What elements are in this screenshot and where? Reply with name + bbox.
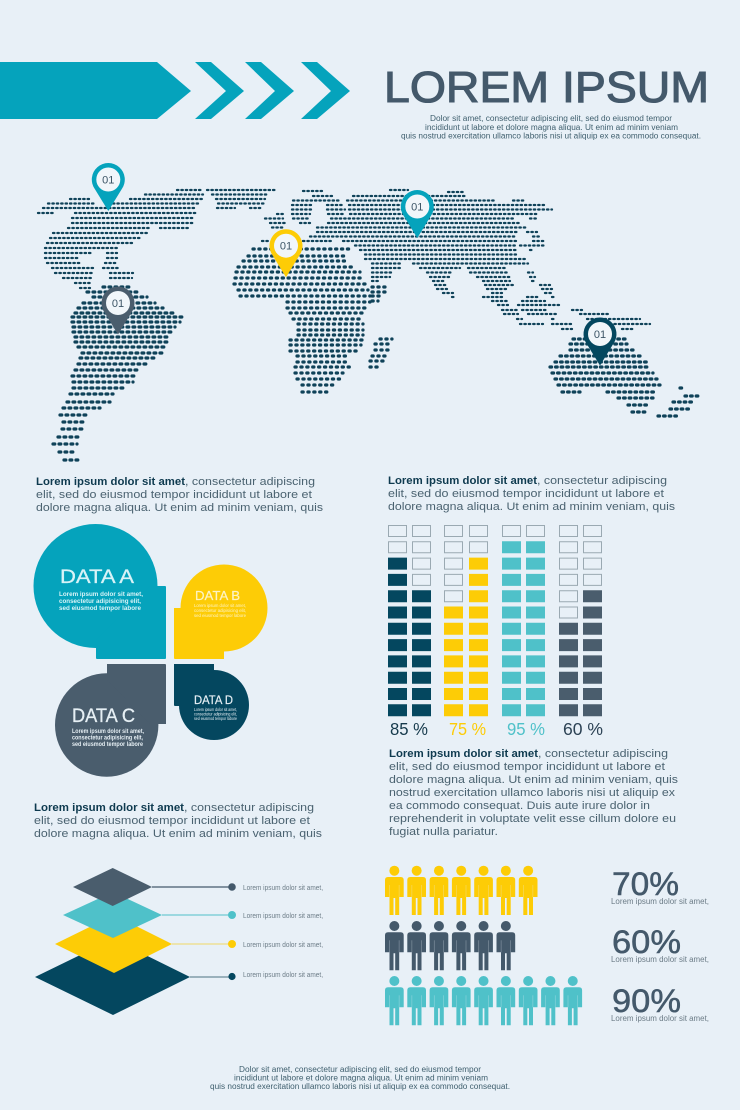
- map pin: south america: [102, 287, 134, 334]
- map pin: asia: 01: [411, 202, 423, 214]
- footer text: quis nostrud exercitation ullamco laboris nisi ut aliquip ex ea commodo consequat.: [210, 1082, 510, 1091]
- map pin: africa: [270, 229, 302, 277]
- paragraph: lower left: Lorem ipsum dolor sit amet: [34, 802, 184, 814]
- layer slate: Lorem ipsum dolor sit amet,: [243, 883, 323, 892]
- map pin: south america: 01: [112, 298, 124, 310]
- data d: DATA D: [194, 695, 233, 707]
- footer text: incididunt ut labore et dolore magna aliqua. Ut enim ad minim veniam: [234, 1074, 488, 1082]
- paragraph: middle right: [389, 748, 679, 838]
- title: LOREM IPSUM: [384, 63, 709, 112]
- stat: 70 percent: [611, 866, 709, 906]
- map pin: australia: 01: [594, 329, 606, 341]
- layer yellow: [55, 915, 323, 973]
- layer teal: [63, 892, 323, 938]
- data b: DATA B: [195, 588, 240, 603]
- paragraph: middle right: nostrud exercitation ullamco laboris nisi ut aliquip ex: [389, 787, 676, 799]
- header description: [401, 114, 701, 140]
- column 85 percent: [388, 526, 430, 739]
- paragraph: upper left: , consectetur adipiscing: [185, 476, 315, 488]
- paragraph: upper left: elit, sed do eiusmod tempor incididunt ut labore et: [36, 489, 312, 501]
- data c: Lorem ipsum dolor sit amet,: [72, 728, 144, 735]
- column 60 percent: 60 %: [563, 719, 603, 739]
- paragraph: middle right: fugiat nulla pariatur.: [389, 826, 498, 838]
- paragraph: lower left: [34, 802, 323, 840]
- paragraph: upper right: elit, sed do eiusmod tempor incididunt ut labore et: [388, 488, 664, 500]
- layer navy: [35, 939, 323, 1015]
- data a: Lorem ipsum dolor sit amet,: [59, 591, 143, 598]
- layer yellow: Lorem ipsum dolor sit amet,: [243, 940, 323, 949]
- eurasia: [262, 190, 650, 329]
- paragraph: lower left: , consectetur adipiscing: [184, 802, 314, 814]
- column 75 percent: [444, 526, 488, 739]
- footer text: [210, 1065, 510, 1091]
- paragraph: middle right: Lorem ipsum dolor sit amet: [389, 748, 538, 760]
- layer slate: [73, 868, 323, 906]
- paragraph: upper right: , consectetur adipiscing: [537, 475, 667, 487]
- data b: [174, 564, 268, 659]
- africa and madagascar: [234, 249, 392, 392]
- north america and greenland: [38, 190, 276, 288]
- data b: consectetur adipisicing elit,: [194, 608, 246, 613]
- header description: Dolor sit amet, consectetur adipiscing elit, sed do eiusmod tempor: [430, 114, 672, 123]
- paragraph: lower left: elit, sed do eiusmod tempor incididunt ut labore et: [34, 815, 310, 827]
- people row: yellow: [385, 866, 538, 915]
- data b: Lorem ipsum dolor sit amet,: [194, 603, 246, 608]
- stat: 60 percent: [611, 924, 709, 964]
- stat: 60 percent: 60%: [612, 924, 681, 960]
- map pin: north america: [92, 163, 125, 211]
- map pin: north america: 01: [102, 174, 114, 186]
- paragraph: upper left: dolore magna aliqua. Ut enim ad minim veniam, quis: [36, 502, 324, 514]
- map pin: asia: [401, 190, 434, 238]
- data d: sed eiusmod tempor labore: [194, 716, 237, 721]
- stat: 70 percent: Lorem ipsum dolor sit amet,: [611, 897, 709, 906]
- footer text: Dolor sit amet, consectetur adipiscing elit, sed do eiusmod tempor: [239, 1065, 481, 1074]
- column 85 percent: 85 %: [390, 719, 428, 739]
- stat: 90 percent: Lorem ipsum dolor sit amet,: [611, 1014, 709, 1023]
- data a: DATA A: [60, 566, 134, 588]
- paragraph: upper right: [388, 475, 676, 513]
- south america: [53, 287, 183, 460]
- data a: sed eiusmod tempor labore: [59, 605, 141, 612]
- block bar chart: [388, 526, 603, 739]
- header description: incididunt ut labore et dolore magna aliqua. Ut enim ad minim veniam: [425, 123, 678, 132]
- column 60 percent: [560, 526, 603, 739]
- layer navy: Lorem ipsum dolor sit amet,: [243, 970, 323, 979]
- layered diamond diagram: [35, 868, 323, 1015]
- data c: DATA C: [72, 706, 135, 727]
- stat: 60 percent: Lorem ipsum dolor sit amet,: [611, 955, 709, 964]
- map pin: australia: [584, 318, 616, 366]
- stat: 90 percent: 90%: [612, 983, 681, 1019]
- paragraph: upper right: Lorem ipsum dolor sit amet: [388, 475, 537, 487]
- data a: [34, 524, 166, 659]
- paragraph: lower left: dolore magna aliqua. Ut enim ad minim veniam, quis: [34, 828, 323, 840]
- stat: 90 percent: [611, 983, 709, 1023]
- paragraph: middle right: ea commodo consequat. Duis aute irure dolor in: [389, 800, 650, 812]
- data a: consectetur adipisicing elit,: [59, 598, 141, 605]
- data d: [174, 664, 249, 740]
- data c: [55, 664, 166, 777]
- paragraph: middle right: elit, sed do eiusmod tempor incididunt ut labore et: [389, 761, 665, 773]
- paragraph: upper left: Lorem ipsum dolor sit amet: [36, 476, 185, 488]
- data c: sed eiusmod tempor labore: [72, 741, 143, 748]
- layer teal: Lorem ipsum dolor sit amet,: [243, 911, 323, 920]
- data d: consectetur adipisicing elit,: [194, 712, 237, 716]
- paragraph: middle right: , consectetur adipiscing: [538, 748, 668, 760]
- people row: slate: [385, 921, 515, 970]
- paragraph: middle right: reprehenderit in voluptate velit esse cillum dolore eu: [389, 813, 676, 825]
- map pin: africa: 01: [280, 241, 292, 253]
- header description: quis nostrud exercitation ullamco laboris nisi ut aliquip ex ea commodo consequat.: [401, 132, 701, 140]
- australia and new zealand: [550, 339, 698, 416]
- data d: Lorem ipsum dolor sit amet,: [194, 707, 237, 712]
- paragraph: upper left: [36, 476, 324, 514]
- column 95 percent: [502, 526, 545, 739]
- column 95 percent: 95 %: [507, 719, 545, 739]
- paragraph: upper right: dolore magna aliqua. Ut enim ad minim veniam, quis: [388, 501, 676, 513]
- paragraph: middle right: dolore magna aliqua. Ut enim ad minim veniam, quis: [389, 774, 679, 786]
- data b: sed eiusmod tempor labore: [194, 613, 246, 618]
- stat: 70 percent: 70%: [612, 866, 679, 902]
- data c: consectetur adipisicing elit,: [72, 734, 143, 742]
- petal diagram: [34, 524, 268, 777]
- people row: teal: [385, 976, 582, 1025]
- column 75 percent: 75 %: [449, 719, 486, 739]
- dotted world map: [38, 190, 698, 460]
- header arrow banner: [0, 62, 350, 119]
